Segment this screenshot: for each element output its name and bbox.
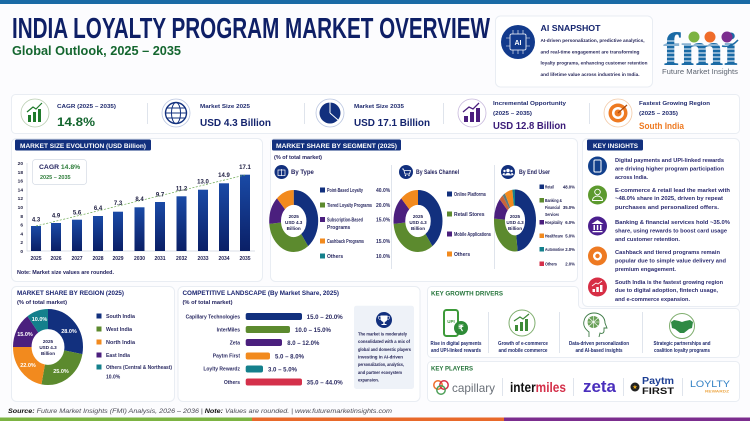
- bar chart: competitors: 15.0 – 20.0%: [307, 315, 343, 321]
- donut labels: region: [17, 317, 77, 375]
- legend: by sales channel: Others: [454, 252, 470, 258]
- legend: by end user: 2.0%: [565, 262, 575, 266]
- donut center label: USD 4.3: [506, 220, 524, 225]
- bar chart: competitors: Zeta: [230, 340, 240, 346]
- legend: region: East India: [106, 353, 130, 359]
- KPI: market size 2035: Market Size 2035: [354, 104, 404, 110]
- bar chart: competitors: Paytm First: [213, 354, 240, 360]
- KPI: incremental opportunity: USD 12.8 Billion: [493, 121, 566, 132]
- callout: CAGR: 2025 – 2035: [40, 175, 71, 181]
- bar chart: competitors: 10.0 – 15.0%: [295, 328, 332, 334]
- bar chart: 13.0: [197, 180, 209, 186]
- bar chart: 0: [20, 249, 23, 255]
- subheading: region percent: (% of total market): [17, 300, 67, 306]
- bar chart: competitors: [186, 313, 343, 386]
- legend: by sales channel: Online Platforms: [454, 192, 486, 198]
- panel: market share by region: [12, 286, 174, 402]
- logo: paytm first: FIRST: [642, 386, 674, 397]
- KPI: incremental opportunity: [458, 99, 566, 132]
- insight: banking: [588, 216, 731, 243]
- logo: paytm first: Paytm: [642, 376, 674, 387]
- logo: capillary: [434, 381, 495, 395]
- bar chart: [18, 161, 255, 262]
- KPI: CAGR: CAGR (2025 – 2035): [57, 104, 116, 110]
- legend: by type: Tiered Loyalty Programs: [327, 203, 372, 209]
- donut labels: region: 2025: [43, 339, 54, 344]
- subheading: competitive percent: (% of total market): [182, 300, 233, 306]
- callout: market note: [354, 306, 414, 389]
- donut center label: USD 4.3: [409, 220, 427, 225]
- insight: digital payments: are driving higher program participation: [615, 167, 724, 173]
- bar chart: 2025: [30, 256, 42, 262]
- driver: UPI payments: UPI: [447, 319, 455, 324]
- legend: by type: [320, 188, 391, 260]
- insight: e-commerce: ~48.0% share in 2025, driven by repeat: [615, 196, 723, 202]
- bar chart: 2028: [92, 256, 104, 262]
- logo: intermiles: intermiles: [510, 379, 566, 395]
- logo: paytm first: ★: [632, 384, 638, 391]
- bar chart: competitors: InterMiles: [217, 328, 240, 334]
- logo: loylty rewardz: LOYLTY: [690, 379, 731, 390]
- insight: banking: Banking & financial services hold ~35.0%: [615, 220, 731, 226]
- bar chart: competitors: 5.0 – 8.0%: [275, 354, 305, 360]
- legend: by type: Others: [327, 254, 343, 260]
- insight: south india: and e-commerce expansion.: [615, 297, 690, 303]
- bar chart: 11.2: [176, 186, 188, 192]
- donut center label: 2025: [510, 214, 521, 219]
- driver: data-driven personalisation: Data-driven personalization: [569, 341, 629, 347]
- donut labels: region: 28.0%: [61, 329, 77, 335]
- logo: capillary: capillary: [452, 381, 495, 395]
- legend: region: North India: [106, 340, 135, 346]
- market note text: expansion.: [358, 378, 379, 382]
- panel: key players: [428, 362, 740, 402]
- donut center label: [506, 214, 524, 231]
- driver: e-commerce growth: and mobile commerce: [498, 348, 548, 354]
- heading: market size evolution: MARKET SIZE EVOLUTION (USD Billion): [20, 143, 146, 150]
- bar chart: 4.9: [52, 214, 61, 220]
- bar chart: 4: [20, 231, 23, 237]
- legend: by end user: Automotive: [545, 247, 564, 252]
- heading: key insights: [587, 140, 643, 150]
- donut center label: Billion: [411, 226, 425, 231]
- donut labels: region: 25.0%: [53, 369, 69, 375]
- market note text: global and domestic players: [358, 347, 411, 352]
- driver: UPI payments: ₹: [458, 323, 464, 333]
- chart: by sales channel: [399, 165, 491, 258]
- legend: by type: 15.0%: [376, 218, 391, 224]
- bar chart: competitors: Capillary Technologies: [186, 314, 240, 320]
- market note text: personalization, analytics,: [358, 362, 404, 367]
- insight: south india: South India is the fastest growing region: [615, 280, 723, 286]
- donut: by end user: [499, 198, 531, 243]
- bar chart: 2033: [197, 256, 209, 262]
- legend: by end user: Financial: [545, 205, 560, 210]
- legend: by type: 15.0%: [376, 239, 391, 245]
- market note text: consolidated with a mix of: [358, 339, 410, 344]
- insight: south india: due to digital adoption, fintech usage,: [615, 288, 718, 294]
- panel: market size evolution: [12, 138, 262, 282]
- AI snapshot text: [540, 38, 648, 77]
- legend: region: West India: [106, 327, 132, 333]
- insight: digital payments: across India.: [615, 175, 648, 181]
- KPI: market size 2025: USD 4.3 Billion: [200, 118, 271, 129]
- logo: zeta: zeta: [583, 377, 617, 396]
- KPI: fastest growing region: Fastest Growing Region: [639, 101, 710, 107]
- panel: KPI strip: [12, 94, 740, 134]
- driver: e-commerce growth: Growth of e-commerce: [498, 341, 548, 347]
- icon: AI chip: [501, 25, 535, 59]
- legend: by end user: 5.0%: [565, 234, 575, 238]
- driver: data-driven personalisation: [569, 313, 629, 354]
- bar chart: 16: [18, 179, 23, 185]
- logo: loylty rewardz: REWARDZ: [705, 390, 730, 394]
- driver: partnerships: coalition loyalty programs: [654, 348, 710, 354]
- title: INDIA LOYALTY PROGRAM MARKET OVERVIEW: [12, 13, 490, 45]
- legend: by end user: Others: [545, 262, 557, 266]
- legend: by sales channel: [447, 192, 491, 258]
- KPI: incremental opportunity: Incremental Opportunity: [493, 101, 566, 107]
- donut center label: USD 4.3: [285, 220, 303, 225]
- logo: FMI: fmi: [663, 24, 738, 76]
- insight: cashback: Cashback and tiered programs remain: [615, 250, 720, 256]
- bar chart: 2: [20, 240, 23, 246]
- legend: by type: Programs: [327, 225, 351, 231]
- KPI: market size 2025: [162, 99, 271, 129]
- KPI: fastest growing region: South India: [639, 121, 685, 132]
- AI snapshot text: and lifetime value across industries in India.: [540, 72, 640, 77]
- market note text: [358, 332, 411, 382]
- AI snapshot text: and real-time engagement are transforming: [540, 50, 640, 54]
- bar chart: 10: [18, 205, 23, 211]
- icon: trophy: [376, 312, 392, 328]
- heading: competitive: COMPETITIVE LANDSCAPE (By Market Share, 2025): [182, 290, 339, 297]
- icon: cart: [399, 165, 413, 179]
- note: Note: Market size values are rounded.: [17, 270, 115, 276]
- bar chart: 2029: [112, 256, 124, 262]
- legend: by type: 20.0%: [376, 203, 391, 209]
- bar chart: 12: [18, 196, 23, 202]
- legend: by end user: Services: [545, 212, 559, 217]
- market note text: and partner ecosystem: [358, 370, 402, 375]
- bar chart: 8: [20, 214, 23, 220]
- donut center label: [409, 214, 427, 231]
- legend: region: [96, 314, 172, 380]
- KPI: market size 2035: USD 17.1 Billion: [354, 118, 430, 129]
- insight: banking: share, using rewards to boost card usage: [615, 229, 728, 235]
- donut center label: Billion: [287, 226, 301, 231]
- bar chart: 2027: [71, 256, 83, 262]
- legend: by type: Point-Based Loyalty: [327, 188, 363, 194]
- legend: region: Others (Central & Northeast): [106, 365, 172, 371]
- bar chart: 2035: [239, 256, 251, 262]
- label: by end user: By End User: [519, 170, 551, 176]
- driver: UPI payments: Rise in digital payments: [430, 341, 482, 347]
- KPI: fastest growing region: [604, 99, 710, 132]
- heading: market size evolution: [15, 140, 151, 150]
- bar chart: 6: [20, 223, 23, 229]
- legend: by sales channel: Retail Stores: [454, 212, 485, 218]
- AI snapshot text: AI-driven personalization, predictive analytics,: [540, 38, 644, 43]
- legend: by end user: Hospitality: [545, 220, 563, 225]
- legend: region: 10.0%: [106, 374, 121, 380]
- legend: by end user: Retail: [545, 184, 554, 190]
- KPI: fastest growing region: (2025 – 2035): [639, 111, 678, 117]
- insight: banking: and customer retention.: [615, 237, 680, 243]
- insight: digital payments: Digital payments and UPI-linked rewards: [615, 158, 725, 164]
- donut labels: region: USD 4.3: [39, 345, 57, 350]
- panel: key insights: [582, 138, 740, 306]
- heading: growth drivers: KEY GROWTH DRIVERS: [431, 290, 504, 298]
- KPI: market size 2025: Market Size 2025: [200, 104, 250, 110]
- driver: partnerships: [654, 314, 710, 354]
- bar chart: 14.9: [218, 173, 230, 179]
- KPI: market size 2035: [316, 99, 430, 129]
- legend: by type: 40.0%: [376, 188, 391, 194]
- top bar: [0, 0, 750, 4]
- legend: by end user: 6.0%: [565, 220, 575, 225]
- market note text: investing in AI-driven: [358, 354, 403, 360]
- bottom colour bar: [0, 418, 750, 421]
- legend: by end user: 35.0%: [563, 205, 575, 210]
- logo: loylty rewardz: [690, 379, 731, 394]
- chart: by type: [274, 165, 391, 260]
- donut: region: [22, 319, 74, 375]
- donut labels: region: 15.0%: [17, 332, 33, 338]
- AI snapshot heading: AI SNAPSHOT: [540, 24, 601, 33]
- source line: Source: Future Market Insights (FMI) Analysis, 2026 – 2036 | Note: Values are rounded. | www.futuremarketinsights.com: [8, 408, 392, 415]
- bar chart: 4.3: [32, 218, 41, 224]
- bar chart: 9.7: [156, 192, 165, 198]
- legend: by end user: [540, 184, 575, 266]
- icon: AI chip: AI: [514, 40, 522, 47]
- donut center label: 2025: [413, 214, 424, 219]
- heading: region: MARKET SHARE BY REGION (2025): [17, 290, 124, 297]
- heading: key players: KEY PLAYERS: [431, 366, 473, 372]
- chart: by end user: [499, 165, 575, 266]
- bar chart: 2026: [50, 256, 62, 262]
- insight: cashback: [588, 246, 726, 273]
- bar chart: 2031: [154, 256, 166, 262]
- KPI: incremental opportunity: (2025 – 2035): [493, 111, 532, 117]
- insight: digital payments: [588, 156, 725, 181]
- driver: UPI payments: and UPI-linked rewards: [431, 348, 481, 354]
- bar chart: 20: [18, 161, 23, 167]
- panel: AI snapshot: [496, 16, 652, 87]
- donut labels: region: 22.0%: [20, 363, 36, 369]
- insight: cashback: popular due to simple value delivery and: [615, 259, 726, 265]
- insight: south india: [588, 278, 723, 303]
- driver: data-driven personalisation: and AI-based insights: [576, 348, 623, 354]
- label: by type: By Type: [291, 170, 315, 176]
- bar chart: 6.4: [94, 206, 103, 212]
- bar chart: 5.6: [73, 210, 82, 216]
- driver: UPI payments: [430, 310, 482, 354]
- KPI: CAGR: [21, 99, 116, 129]
- bar chart: competitors: 8.0 – 12.0%: [287, 341, 320, 347]
- bar chart: 18: [18, 170, 23, 176]
- legend: by end user: 2.0%: [565, 247, 575, 252]
- legend: by end user: Healthcare: [545, 234, 563, 238]
- insight: e-commerce: [588, 186, 730, 211]
- legend: by type: 10.0%: [376, 254, 391, 260]
- heading: key insights: KEY INSIGHTS: [593, 143, 639, 150]
- subtitle: Global Outlook, 2025 – 2035: [12, 44, 181, 58]
- market note text: The market is moderately: [358, 332, 407, 336]
- donut labels: region: 10.0%: [32, 317, 47, 323]
- bar chart: 7.3: [114, 201, 123, 207]
- legend: by sales channel: Mobile Applications: [454, 232, 491, 238]
- legend: by end user: Banking &: [545, 198, 563, 203]
- heading: segment: MARKET SHARE BY SEGMENT (2025): [276, 143, 397, 150]
- bar chart: competitors: Loylty Rewardz: [203, 366, 240, 372]
- heading: segment: [272, 140, 401, 150]
- donut center label: [285, 214, 303, 231]
- insight: cashback: premium engagement.: [615, 267, 676, 273]
- bar chart: competitors: 3.0 – 5.0%: [268, 368, 298, 374]
- legend: by type: Subscription-Based: [327, 218, 363, 224]
- bar chart: 2034: [218, 256, 230, 262]
- bar chart: competitors: 35.0 – 44.0%: [307, 380, 343, 386]
- icon: gift: [274, 165, 288, 179]
- icon: users: [501, 165, 515, 179]
- bar chart: 14: [18, 187, 23, 193]
- legend: region: South India: [106, 314, 135, 320]
- subheading: percent of total: (% of total market): [274, 155, 322, 161]
- legend: by end user: 48.0%: [563, 184, 575, 190]
- bar chart: 2032: [176, 256, 187, 262]
- logo: paytm first: [630, 376, 674, 397]
- panel: competitive landscape: [178, 286, 420, 402]
- driver: partnerships: Strategic partnerships and: [654, 341, 710, 347]
- AI snapshot text: loyalty programs, enhancing customer retention: [540, 60, 648, 66]
- bar chart: 2030: [134, 256, 145, 262]
- donut: by sales channel: [399, 197, 437, 245]
- donut: by type: [275, 197, 312, 245]
- legend: by type: Cashback Programs: [327, 239, 364, 245]
- bar chart: competitors: Others: [224, 380, 240, 386]
- panel: key growth drivers: [428, 286, 740, 358]
- bar chart: 8.4: [135, 197, 144, 203]
- driver: e-commerce growth: [498, 310, 548, 354]
- label: by sales channel: By Sales Channel: [416, 170, 459, 176]
- donut labels: region: Billion: [41, 351, 55, 356]
- bar chart: 17.1: [239, 165, 251, 171]
- donut center label: Billion: [508, 226, 522, 231]
- insight: e-commerce: E-commerce & retail lead the market with: [615, 188, 730, 194]
- logo: FMI: Future Market Insights: [662, 67, 738, 76]
- callout: CAGR: [32, 160, 86, 184]
- donut center label: 2025: [289, 214, 299, 219]
- callout: CAGR: CAGR 14.8%: [39, 164, 80, 171]
- insight: e-commerce: purchases and personalized offers.: [615, 205, 719, 211]
- KPI: CAGR: 14.8%: [57, 115, 95, 129]
- panel: market share by segment: [270, 138, 578, 282]
